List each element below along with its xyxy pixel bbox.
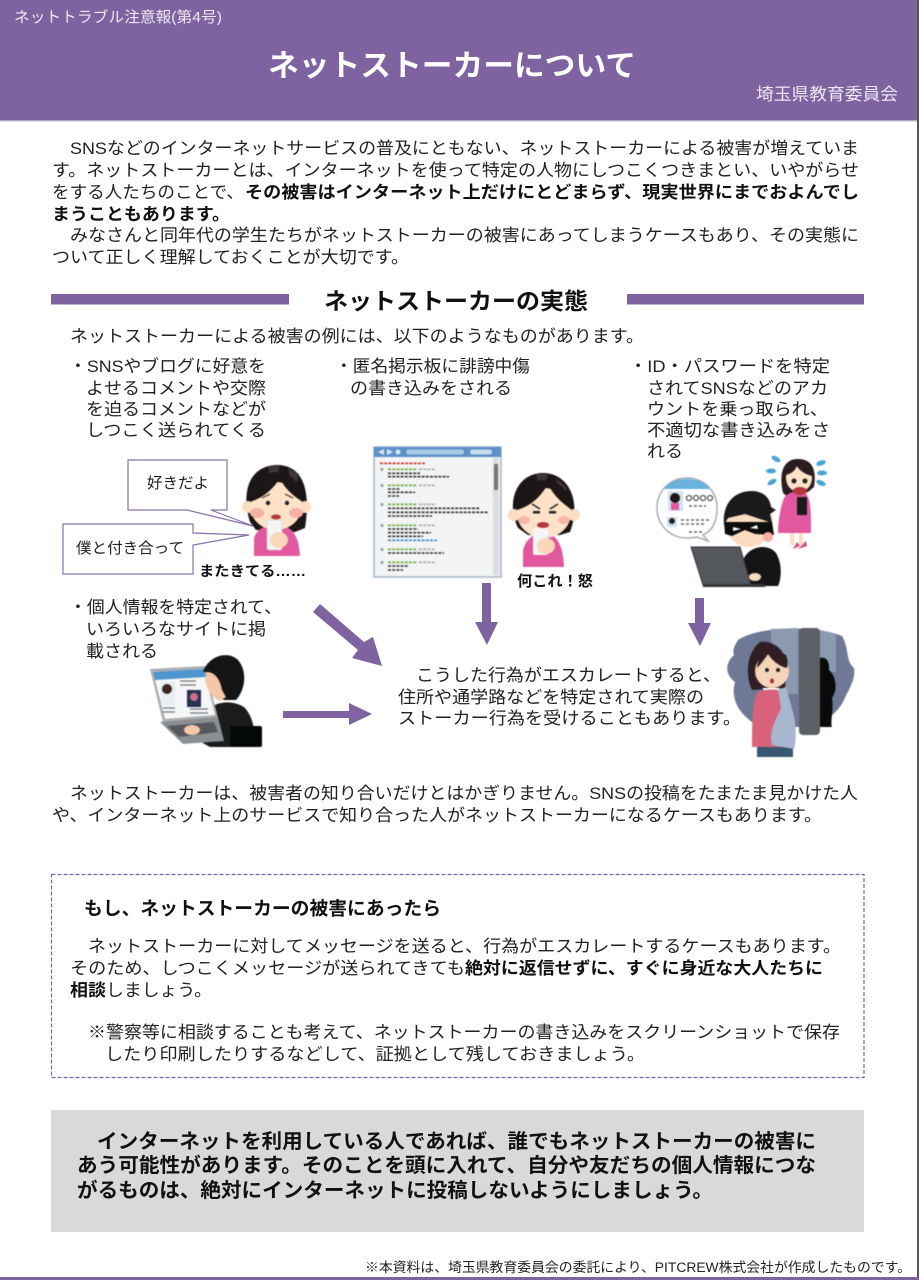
panel: closing message: インターネットを利用している人であれば、誰でもネットストーカーの被害に: [97, 1130, 816, 1153]
example 4 text: 載される: [86, 642, 158, 661]
icon: woman followed by shadowy stalker: [727, 628, 854, 757]
panel advice text: [70, 937, 841, 1000]
speech bubble: 好きだよ: 好きだよ: [147, 475, 209, 492]
arrow: down from bulletin board: [475, 583, 498, 645]
example 3 text: れる: [647, 442, 683, 461]
paragraph: who stalkers are: [52, 784, 858, 825]
panel advice text: そのため、しつこくメッセージが送られてきても: [70, 959, 465, 978]
intro paragraph: その被害はインターネット上だけにとどまらず、現実世界にまでおよんでし: [245, 182, 859, 202]
panel note: ※警察等に相談することも考えて、ネットストーカーの書き込みをスクリーンショットで保存: [88, 1023, 840, 1042]
example 1 text: を迫るコメントなどが: [86, 400, 266, 419]
escalation text: 住所や通学路などを特定されて実際の: [398, 688, 704, 707]
panel: what to do if victimized: [52, 874, 864, 1078]
icon: shocked girl with phone: [766, 454, 827, 549]
icon: account profile bubble: [657, 478, 717, 541]
panel heading: もし、ネットストーカーの被害にあったら: [84, 898, 441, 919]
intro paragraph: SNSなどのインターネットサービスの普及にともない、ネットストーカーによる被害が増えていま: [70, 139, 859, 158]
speech bubble: 僕と付き合って: [63, 524, 249, 574]
example 3 text: ウントを乗っ取られ、: [647, 400, 828, 419]
icon: masked thief at laptop: [691, 491, 781, 587]
example 2 text: ・匿名掲示板に誹謗中傷: [335, 357, 530, 376]
example 3 text: されてSNSなどのアカ: [647, 379, 828, 398]
header band: [0, 0, 917, 122]
example 1 text: しつこく送られてくる: [86, 421, 266, 440]
caption: またきてる: またきてる……: [199, 563, 306, 579]
escalation text: [398, 666, 741, 728]
icon: angry girl with phone: [508, 473, 580, 567]
example 1 text: [69, 356, 266, 440]
panel note: [88, 1023, 840, 1064]
example 4 text: [69, 598, 282, 661]
example 2 text: の書き込みをされる: [350, 379, 512, 398]
panel advice text: ネットストーカーに対してメッセージを送ると、行為がエスカレートするケースもあります。: [88, 937, 841, 956]
section intro text: ネットストーカーによる被害の例には、以下のようなものがあります。: [70, 327, 644, 346]
example 1 text: よせるコメントや交際: [86, 379, 266, 398]
intro paragraph: [52, 139, 859, 267]
paragraph: who stalkers are: ネットストーカーは、被害者の知り合いだけとはかぎりません。SNSの投稿をたまたま見かけた人: [70, 784, 858, 803]
icon: bulletin board window: [374, 447, 501, 577]
example 4 text: ・個人情報を特定されて、: [69, 598, 282, 617]
intro paragraph: をする人たちのことで、: [52, 183, 244, 202]
example 1 text: ・SNSやブログに好意を: [69, 356, 266, 376]
example 4 text: いろいろなサイトに掲: [86, 620, 266, 639]
section heading: ネットストーカーの実態: [324, 288, 588, 314]
paragraph: who stalkers are: や、インターネット上のサービスで知り合った人がネットストーカーになるケースもあります。: [52, 806, 822, 825]
footer note: ※本資料は、埼玉県教育委員会の委託により、PITCREW株式会社が作成したものです。: [365, 1260, 911, 1275]
arrow: horizontal to escalation text: [283, 703, 372, 725]
intro paragraph: す。ネットストーカーとは、インターネットを使って特定の人物にしつこくつきまとい、いやがらせ: [52, 160, 859, 180]
intro paragraph: ついて正しく理解しておくことが大切です。: [52, 248, 409, 267]
intro paragraph: まうこともあります。: [52, 205, 230, 224]
panel advice text: 相談: [70, 981, 106, 1000]
publisher: 埼玉県教育委員会: [756, 85, 898, 104]
panel advice text: しましょう。: [106, 981, 212, 1000]
title: ネットストーカーについて: [268, 50, 636, 83]
example 3 text: [629, 357, 830, 461]
example 3 text: 不適切な書き込みをさ: [647, 421, 830, 440]
caption: 何これ！怒: 何これ！怒: [517, 572, 593, 590]
panel advice text: 絶対に返信せずに、すぐに身近な大人たちに: [465, 959, 823, 978]
panel: closing message: [51, 1110, 864, 1232]
panel: closing message: がるものは、絶対にインターネットに投稿しないようにしましょう。: [77, 1178, 713, 1202]
speech bubble: 好きだよ: [128, 460, 253, 526]
example 3 text: ・ID・パスワードを特定: [629, 357, 830, 376]
escalation text: こうした行為がエスカレートすると、: [416, 666, 721, 685]
intro paragraph: みなさんと同年代の学生たちがネットストーカーの被害にあってしまうケースもあり、その実態に: [70, 226, 859, 245]
escalation text: ストーカー行為を受けることもあります。: [398, 709, 741, 728]
panel note: したり印刷したりするなどして、証拠として残しておきましょう。: [105, 1045, 645, 1064]
issue label: ネットトラブル注意報(第4号): [14, 8, 222, 26]
arrow: diagonal to escalation text: [313, 604, 382, 666]
example 2 text: [335, 357, 530, 398]
icon: person browsing personal information on laptop: [150, 655, 262, 747]
speech bubble: 僕と付き合って: 僕と付き合って: [76, 540, 184, 557]
panel: closing message: あう可能性があります。そのことを頭に入れて、自分や友だちの個人情報につな: [77, 1153, 816, 1177]
icon: worried girl with phone: [242, 465, 311, 556]
arrow: down from thief: [688, 598, 711, 646]
section heading: [51, 288, 864, 314]
